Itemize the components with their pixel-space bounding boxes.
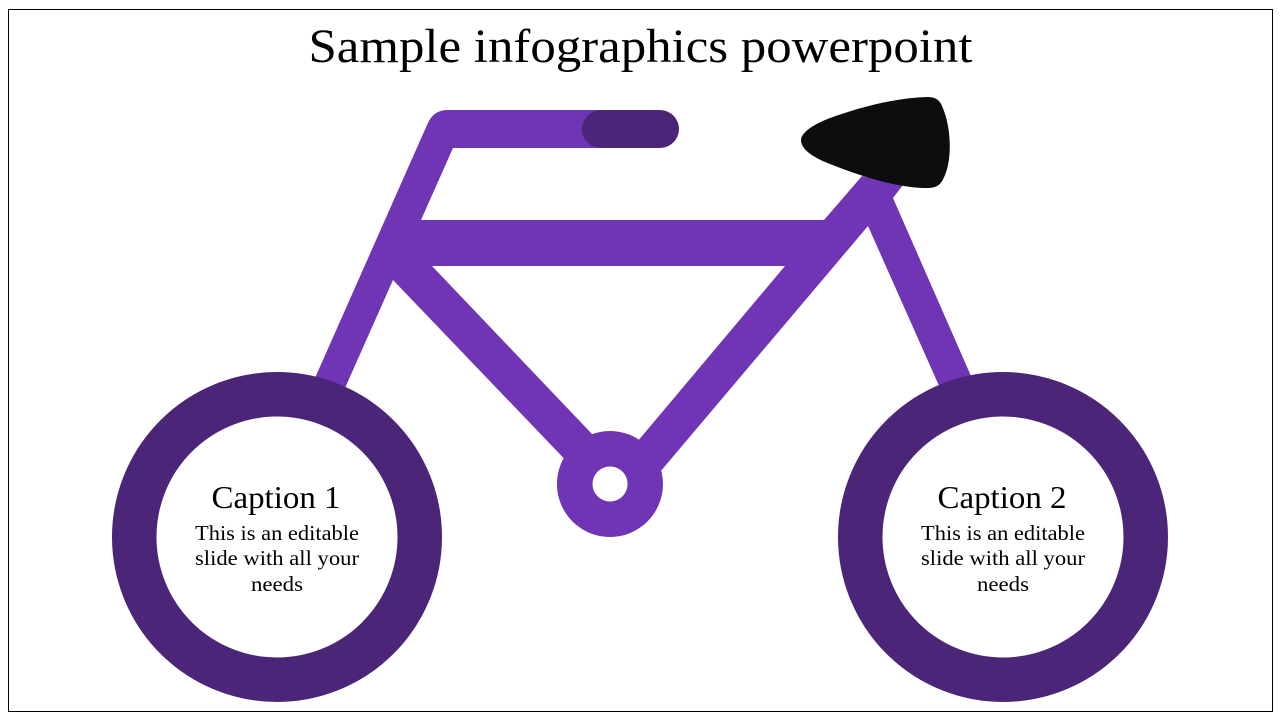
caption 1 text: needs [251,572,303,596]
top tube [393,176,971,472]
wheel: caption 1 [134,394,420,680]
icon: bicycle [315,97,971,537]
wheel: caption 2 [860,394,1146,680]
caption 1 text: This is an editable [195,521,359,545]
bicycle frame [315,110,971,537]
caption 2 text: needs [977,572,1029,596]
caption 2 text: slide with all your [921,546,1085,570]
crank ring [557,431,663,537]
handlebar grip [582,110,679,148]
caption 1 text [195,521,359,596]
caption 1 heading: Caption 1 [212,479,340,515]
title: Sample infographics powerpoint [308,20,973,73]
caption 2 heading: Caption 2 [938,479,1066,515]
caption 1 text: slide with all your [195,546,359,570]
handlebar and front fork [315,110,660,388]
caption 2 text: This is an editable [921,521,1085,545]
caption 2 text [921,521,1085,596]
seat [801,97,950,188]
